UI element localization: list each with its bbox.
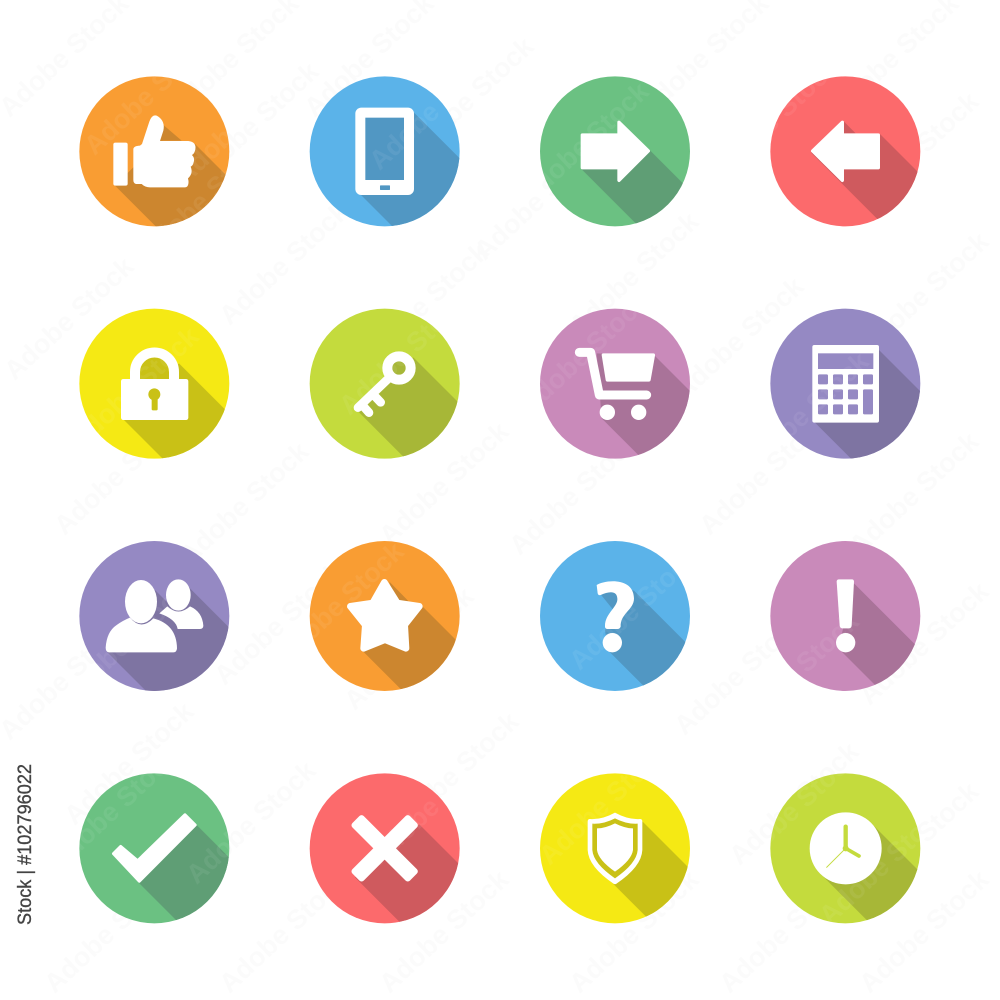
watermark over icons: Adobe Stock	[268, 536, 410, 671]
watermark over icons: Adobe Stock	[733, 346, 875, 481]
watermark over icons: Adobe Stock	[513, 76, 655, 211]
icon: star	[310, 541, 460, 691]
icon: thumbs up	[79, 76, 230, 226]
watermark over icons: Adobe Stock	[180, 755, 322, 890]
icon: key	[310, 308, 460, 459]
icon: calculator	[770, 308, 920, 459]
icon: question mark	[540, 541, 690, 691]
icon: right arrow	[540, 76, 690, 226]
watermark over icons: Adobe Stock	[813, 796, 955, 931]
watermark over icons: Adobe Stock	[63, 321, 205, 456]
watermark over icons: Adobe Stock	[363, 41, 505, 176]
icon: padlock	[79, 308, 230, 459]
watermark over icons: Adobe Stock	[333, 286, 475, 421]
watermark over icons: Adobe Stock	[363, 736, 505, 871]
icon: shield	[540, 773, 690, 924]
icon: exclamation mark	[770, 541, 920, 691]
watermark over icons: Adobe Stock	[43, 741, 185, 876]
icon: shopping cart	[540, 308, 690, 459]
watermark over icons: Adobe Stock	[723, 606, 865, 741]
icon set canvas	[16, 76, 920, 924]
watermark over icons: Adobe Stock	[533, 736, 675, 871]
watermark over icons: Adobe Stock	[703, 51, 845, 186]
icon: left arrow	[770, 76, 920, 226]
stock id label: Stock | #102796022	[15, 764, 36, 925]
watermark over icons: Adobe Stock	[723, 741, 865, 876]
icon: clock	[770, 773, 920, 924]
icon: cross	[310, 773, 460, 924]
watermark over icons: Adobe Stock	[513, 286, 655, 421]
watermark over icons: Adobe Stock	[133, 131, 275, 266]
icon: users	[79, 541, 230, 691]
watermark over icons: Adobe Stock	[53, 576, 195, 711]
icon: smartphone	[310, 76, 460, 226]
icon: check mark	[79, 773, 230, 924]
watermark over icons: Adobe Stock	[168, 56, 310, 191]
watermark over icons: Adobe Stock	[78, 26, 220, 161]
watermark over icons: Adobe Stock	[563, 541, 705, 676]
